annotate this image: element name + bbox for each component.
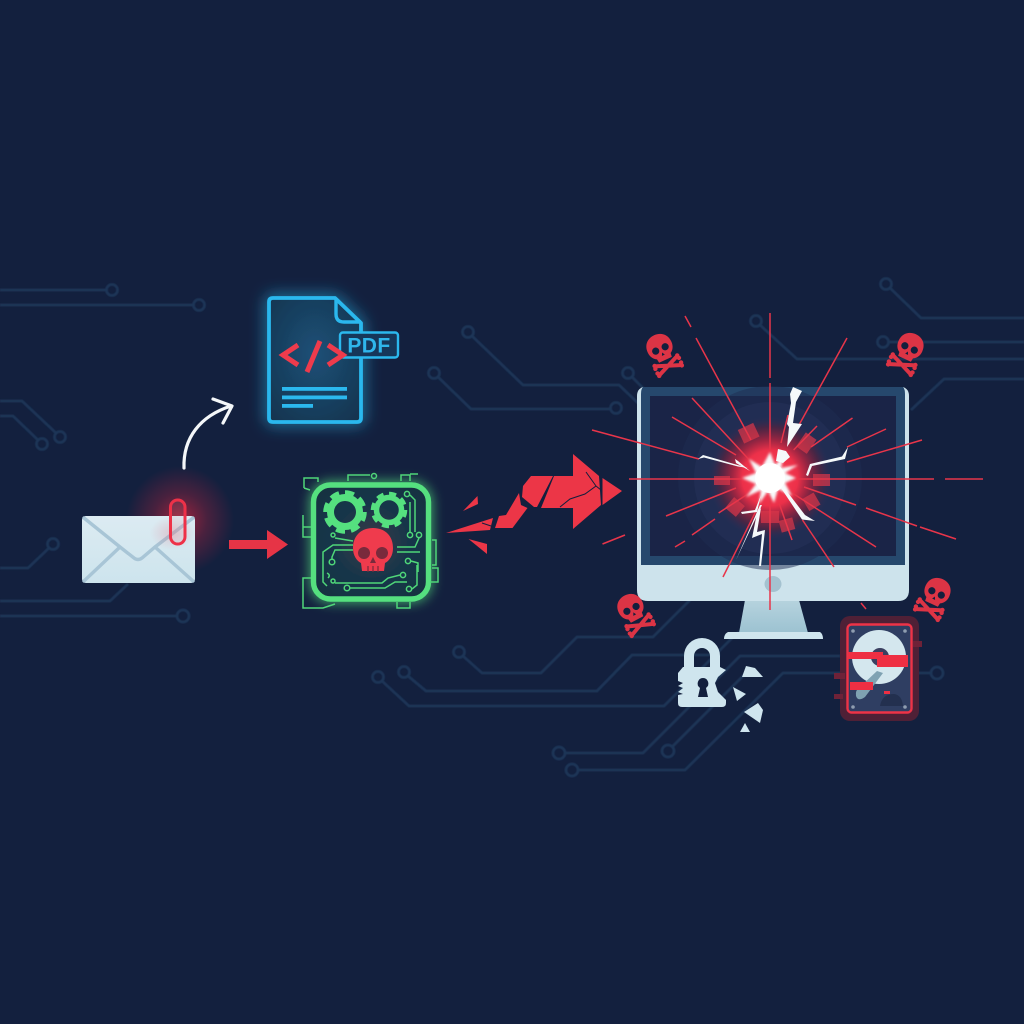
PDF label: PDF (347, 334, 391, 358)
icon: corrupted hard drive (834, 616, 922, 721)
white flash core (755, 463, 785, 493)
burst halo rings (678, 386, 862, 570)
envelope body (82, 516, 195, 583)
paperclip (170, 500, 185, 544)
icon: malware circuit chip (303, 474, 438, 608)
read arm (856, 671, 883, 699)
chip body (314, 485, 428, 599)
white cracks (698, 387, 848, 566)
icon: skull top right (885, 328, 930, 378)
arrow: curved white arrow to document (184, 399, 232, 468)
padlock shackle (689, 643, 715, 668)
monitor logo (764, 576, 782, 592)
icon: email envelope with paperclip (82, 466, 234, 583)
keyhole (698, 678, 708, 697)
icon: skull top left (640, 329, 685, 379)
icon: skull lower left (611, 589, 657, 639)
padlock body (678, 667, 726, 707)
screen (650, 396, 896, 556)
inner chip traces (323, 491, 422, 592)
PDF tag (340, 332, 398, 358)
envelope flap lines (84, 518, 193, 581)
monitor stand (739, 600, 808, 633)
screen bezel (641, 387, 905, 565)
monitor stand base (724, 632, 823, 639)
impact burst on screen (592, 313, 983, 610)
code symbol (283, 341, 343, 372)
monitor casing (637, 387, 909, 601)
pixel fragments (714, 423, 830, 533)
corner screws (851, 629, 907, 709)
document text lines (282, 387, 347, 408)
icon: skull lower right (912, 573, 957, 623)
white flash centre (742, 452, 798, 504)
platter (852, 630, 906, 684)
outer chip traces (303, 474, 438, 608)
padlock shards (742, 666, 763, 677)
hard drive case (848, 624, 912, 712)
icon: PDF document with code (269, 298, 398, 422)
circuit board traces (0, 278, 1024, 776)
icon: computer monitor (637, 387, 909, 639)
folded corner (336, 298, 361, 322)
skull (353, 528, 393, 572)
glitch bars (848, 652, 908, 694)
document outline (269, 298, 361, 422)
arrow: red arrow to malware chip (229, 530, 288, 559)
icon: broken padlock (678, 643, 763, 732)
gear small (373, 494, 405, 526)
gear large (326, 493, 364, 531)
platter hub (871, 648, 889, 666)
glow behind paperclip (126, 466, 234, 574)
arrow: shattered red arrow (446, 454, 622, 554)
red glow (708, 416, 832, 540)
hard drive glow panel (840, 616, 919, 721)
arrow cracks (482, 472, 601, 526)
dim glitch blocks (834, 641, 922, 699)
actuator (880, 694, 903, 706)
red tint on envelope corner (150, 516, 195, 550)
red rays (592, 313, 983, 610)
